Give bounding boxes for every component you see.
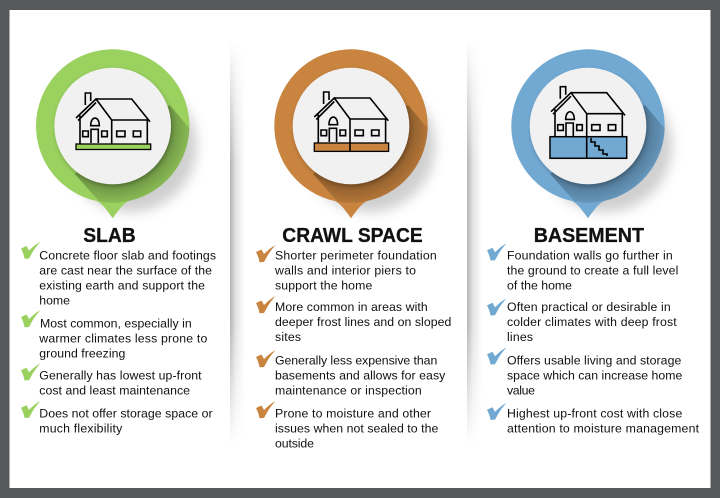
checklist: crawl space: sites: [275, 330, 301, 344]
checklist: basement: attention to moisture management: [507, 421, 700, 435]
checklist: slab: are cast near the surface of the: [39, 264, 212, 278]
checklist: crawl space: outside: [275, 436, 314, 450]
panel: basement: [487, 49, 700, 435]
checklist: crawl space: basements and allows for easy: [275, 368, 446, 382]
checklist: basement: Often practical or desirable in: [507, 300, 671, 314]
panel: slab: [21, 49, 216, 435]
checklist: basement: lines: [507, 330, 533, 344]
heading: slab: SLAB: [83, 225, 136, 247]
icon: house on crawl space: [314, 92, 389, 151]
checklist: slab: Most common, especially in: [40, 316, 192, 330]
checklist: basement: the ground to create a full level: [507, 264, 678, 278]
pin icon: basement: [511, 49, 678, 218]
icon: house on slab: [76, 93, 151, 150]
checklist: slab: warmer climates less prone to: [38, 332, 207, 346]
checklist: crawl space: Prone to moisture and other: [275, 406, 431, 420]
heading: basement: BASEMENT: [534, 225, 644, 247]
checklist: slab: cost and least maintenance: [39, 383, 190, 397]
checklist: slab: Does not offer storage space or: [39, 406, 213, 420]
checklist: crawl space: walls and interior piers to: [274, 264, 416, 278]
checklist: crawl space: More common in areas with: [275, 300, 428, 314]
pin icon: slab: [36, 49, 202, 218]
checklist: slab: home: [39, 294, 70, 308]
checklist: basement: Foundation walls go further in: [507, 248, 673, 262]
checklist: crawl space: maintenance or inspection: [275, 383, 422, 397]
pin icon: crawl space: [274, 49, 440, 218]
checklist: slab: existing earth and support the: [39, 278, 205, 292]
checklist: basement: value: [507, 383, 535, 397]
checklist: crawl space: [256, 245, 451, 450]
checklist: crawl space: Shorter perimeter foundation: [275, 248, 437, 262]
heading: crawl space: CRAWL SPACE: [282, 225, 423, 247]
checklist: slab: much flexibility: [39, 421, 123, 435]
checklist: basement: Offers usable living and storage: [507, 353, 681, 367]
checklist: basement: Highest up-front cost with close: [507, 406, 682, 420]
panel: crawl space: [256, 49, 451, 450]
checklist: crawl space: Generally less expensive than: [275, 353, 437, 367]
checklist: basement: space which can increase home: [507, 368, 682, 382]
checklist: crawl space: issues when not sealed to the: [275, 421, 438, 435]
checklist: slab: [21, 242, 216, 435]
checklist: crawl space: support the home: [275, 278, 372, 292]
column shadow dividers: [230, 40, 482, 445]
checklist: basement: of the home: [507, 278, 572, 292]
checklist: slab: ground freezing: [39, 346, 125, 360]
checklist: basement: colder climates with deep frost: [507, 315, 677, 329]
checklist: basement: [487, 243, 700, 435]
icon: house with basement: [550, 87, 627, 158]
checklist: crawl space: deeper frost lines and on sloped: [275, 315, 451, 329]
checklist: slab: Concrete floor slab and footings: [39, 248, 216, 262]
checklist: slab: Generally has lowest up-front: [39, 368, 202, 382]
